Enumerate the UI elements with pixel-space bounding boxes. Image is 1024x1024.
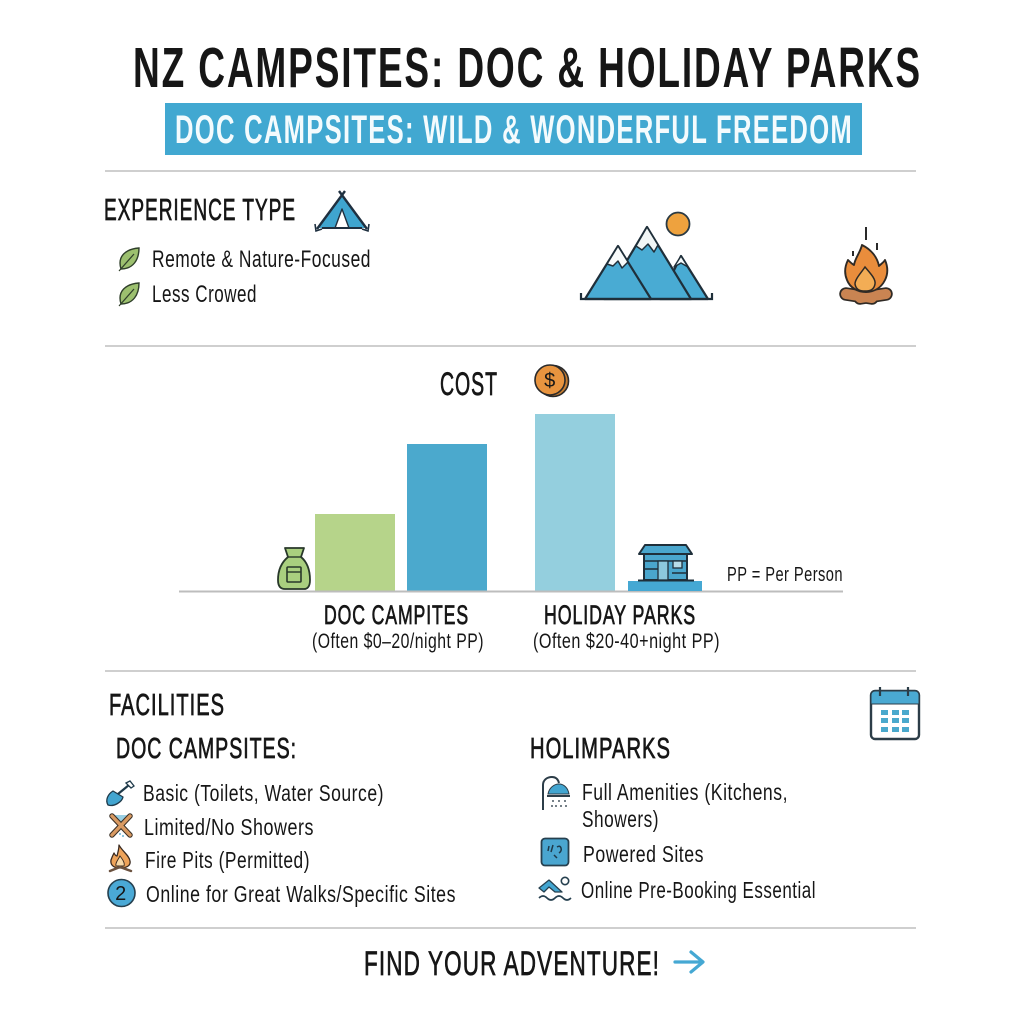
- text: less crowed: Less Crowed: [152, 281, 257, 308]
- note: PP = Per Person: PP = Per Person: [727, 564, 843, 586]
- heading: cost: COST: [440, 366, 498, 402]
- bar: green: [315, 514, 395, 591]
- heading: DOC campsites: DOC CAMPSITES:: [116, 733, 297, 765]
- icon: swimmer: [539, 877, 571, 900]
- label: holiday parks: [533, 600, 720, 653]
- heading: experience type: EXPERIENCE TYPE: [104, 192, 296, 227]
- icon: fire pit: [110, 845, 131, 871]
- bar chart: cost comparison: [179, 414, 843, 592]
- text: full amenities: Full Amenities (Kitchens,: [582, 779, 788, 805]
- panel: DOC campsites facilities: [107, 733, 456, 907]
- icon: campfire: [845, 227, 887, 298]
- bar: light blue: [535, 414, 615, 591]
- heading: holimparks: HOLIMPARKS: [530, 733, 671, 765]
- text: online for great walks: Online for Great Walks/Specific Sites: [146, 881, 456, 907]
- banner: DOC campsites subtitle: [165, 103, 862, 155]
- text: fire pits: Fire Pits (Permitted): [145, 847, 310, 873]
- text: basic: Basic (Toilets, Water Source): [143, 780, 384, 806]
- call to action: FIND YOUR ADVENTURE!: [364, 945, 660, 983]
- icon: powered sites: [542, 838, 568, 866]
- label: DOC campites: [312, 600, 484, 653]
- icon: calendar: [871, 687, 919, 739]
- arrow: [675, 952, 703, 972]
- icon: crossed logs: [112, 815, 130, 837]
- icon: mountains and sun: [581, 212, 712, 299]
- label: DOC campites: DOC CAMPITES: [324, 600, 469, 630]
- text: remote and nature-focused: Remote & Nature-Focused: [152, 246, 371, 273]
- text: online pre-booking: Online Pre-Booking Essential: [581, 877, 816, 903]
- icon: cabin: [628, 545, 702, 591]
- icon: coin: [535, 365, 568, 396]
- icon: number 2 badge: [108, 880, 135, 906]
- panel: holiday parks facilities: [530, 733, 816, 903]
- bar: blue: [407, 444, 487, 591]
- icon: leaf: [119, 283, 139, 306]
- label: holiday parks: HOLIDAY PARKS: [544, 600, 696, 630]
- panel: holiday parks facilities: Showers): [582, 806, 659, 832]
- label: DOC campites: (Often $0–20/night PP): [312, 630, 484, 653]
- icon: shovel: [107, 781, 134, 805]
- label: holiday parks: (Often $20-40+night PP): [533, 630, 720, 653]
- text: limited showers: Limited/No Showers: [144, 814, 314, 840]
- icon: shower: [543, 777, 570, 810]
- icon: coin: $: [544, 370, 556, 392]
- icon: tent: [315, 191, 369, 231]
- icon: sack: [278, 548, 310, 589]
- panel: experience type: [104, 191, 371, 308]
- text: powered sites: Powered Sites: [583, 841, 704, 867]
- heading: facilities: FACILITIES: [109, 687, 225, 722]
- icon: number 2 badge: 2: [115, 883, 127, 905]
- icon: leaf: [119, 248, 139, 271]
